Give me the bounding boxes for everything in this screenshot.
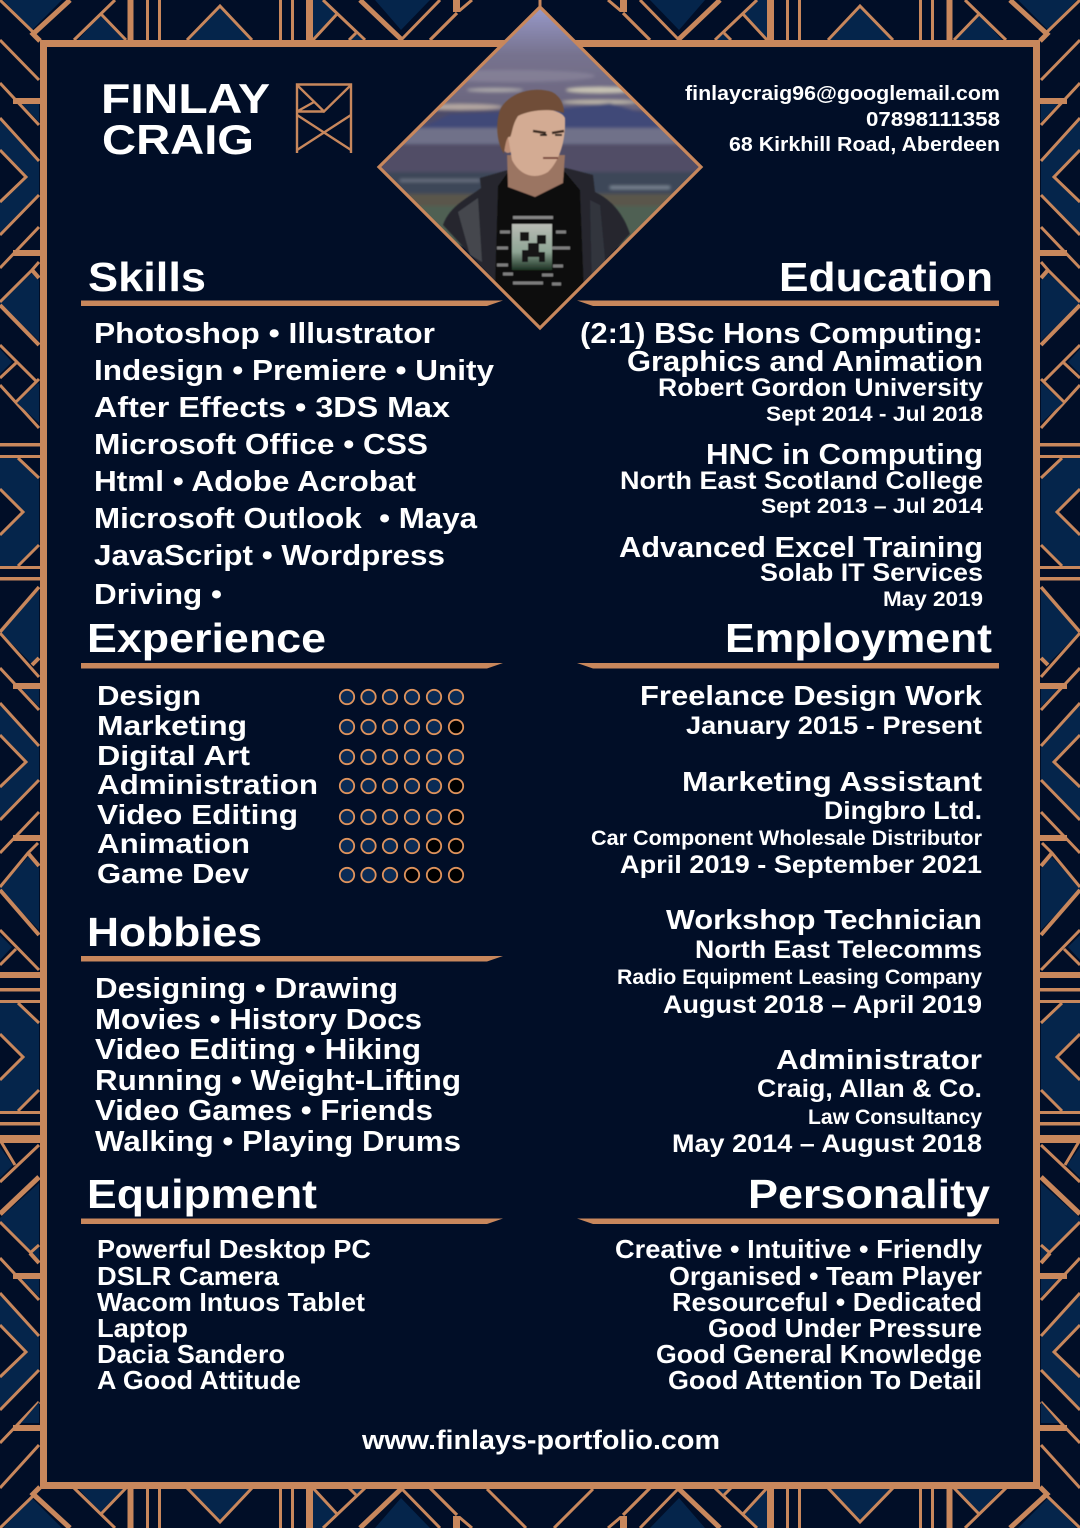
chart: experience rating dots — [340, 690, 463, 882]
divider: experience — [81, 663, 503, 668]
list: experience labels: Video Editing — [97, 799, 298, 830]
list: experience labels: Marketing — [97, 710, 247, 741]
list: education entries: HNC in Computing — [706, 439, 983, 471]
list: equipment: DSLR Camera — [97, 1261, 280, 1291]
panel: hobbies — [81, 909, 503, 1158]
list: employment entries: Workshop Technician — [666, 904, 982, 935]
list: experience labels: Digital Art — [97, 740, 250, 771]
panel: employment — [577, 615, 999, 1158]
list: skills: After Effects • 3DS Max — [94, 392, 450, 424]
list: employment entries: April 2019 - September 2021 — [620, 851, 982, 879]
list: skills — [94, 318, 494, 611]
list: equipment: Wacom Intuos Tablet — [97, 1287, 365, 1317]
divider: personality — [577, 1218, 999, 1224]
list: personality: Organised • Team Player — [669, 1261, 982, 1291]
divider: hobbies — [81, 956, 503, 962]
list: equipment: A Good Attitude — [97, 1365, 301, 1395]
panel: skills — [81, 254, 503, 611]
list: education entries: Solab IT Services — [760, 559, 983, 587]
list: education entries: Advanced Excel Training — [619, 532, 983, 564]
list: personality: Good General Knowledge — [656, 1339, 982, 1369]
list: employment entries: Law Consultancy — [808, 1106, 982, 1129]
list: hobbies: Designing • Drawing — [95, 973, 398, 1005]
list: personality: Good Under Pressure — [708, 1313, 982, 1343]
list: equipment: Powerful Desktop PC — [97, 1234, 371, 1264]
list: hobbies: Video Games • Friends — [95, 1095, 433, 1127]
list: hobbies: Movies • History Docs — [95, 1004, 422, 1036]
list: personality: Resourceful • Dedicated — [672, 1287, 982, 1317]
list: skills: Microsoft Office • CSS — [94, 429, 428, 461]
divider: equipment — [81, 1218, 503, 1224]
list: skills: Indesign • Premiere • Unity — [94, 355, 494, 387]
list: experience labels: Administration — [97, 769, 318, 800]
heading: experience: Experience — [87, 615, 326, 661]
list: employment entries: North East Telecomms — [695, 936, 982, 964]
list: employment entries: Dingbro Ltd. — [824, 797, 982, 825]
divider: education — [577, 300, 999, 306]
list: education entries: Graphics and Animation — [627, 346, 983, 378]
list: education entries: Robert Gordon University — [658, 374, 983, 402]
divider: skills — [81, 300, 503, 306]
list: education entries: May 2019 — [883, 588, 983, 611]
footer website: www.finlays-portfolio.com — [361, 1425, 720, 1455]
panel: experience — [81, 615, 503, 889]
list: experience labels: Design — [97, 680, 201, 711]
panel: education — [577, 254, 999, 611]
heading: hobbies: Hobbies — [87, 909, 262, 955]
list: skills: Microsoft Outlook • Maya — [94, 503, 478, 535]
list: education entries — [580, 318, 983, 611]
list: skills: Html • Adobe Acrobat — [94, 466, 416, 498]
list: employment entries: Freelance Design Work — [640, 680, 982, 711]
name title — [101, 75, 270, 163]
heading: personality: Personality — [748, 1171, 990, 1217]
heading: employment: Employment — [725, 615, 992, 661]
divider: employment — [577, 663, 999, 668]
list: experience labels — [97, 680, 318, 889]
list: personality: Creative • Intuitive • Friendly — [615, 1234, 983, 1264]
portrait photo in diamond — [370, 0, 710, 330]
list: equipment: Dacia Sandero — [97, 1339, 285, 1369]
icon: envelope logo — [297, 84, 351, 153]
contact details: 07898111358 — [866, 109, 1000, 131]
list: experience labels: Game Dev — [97, 858, 249, 889]
list: employment entries — [591, 680, 983, 1158]
list: employment entries: Craig, Allan & Co. — [757, 1075, 982, 1103]
list: education entries: (2:1) BSc Hons Computing: — [580, 318, 983, 350]
list: personality — [615, 1234, 983, 1395]
list: equipment — [97, 1234, 371, 1395]
list: employment entries: Marketing Assistant — [682, 766, 982, 797]
list: hobbies: Running • Weight-Lifting — [95, 1065, 461, 1097]
contact details: 68 Kirkhill Road, Aberdeen — [729, 134, 1000, 156]
list: employment entries: January 2015 - Present — [686, 712, 983, 740]
list: skills: JavaScript • Wordpress — [94, 540, 445, 572]
list: employment entries: Car Component Wholesale Distributor — [591, 827, 982, 850]
list: employment entries: Administrator — [776, 1044, 982, 1075]
heading: equipment: Equipment — [87, 1171, 317, 1217]
heading: skills: Skills — [88, 254, 206, 300]
panel: personality — [577, 1171, 999, 1395]
contact details — [685, 83, 1000, 156]
list: employment entries: August 2018 – April 2019 — [663, 991, 982, 1019]
heading: education: Education — [779, 254, 993, 300]
list: skills: Driving • — [94, 579, 222, 611]
list: education entries: North East Scotland College — [620, 467, 983, 495]
list: employment entries: Radio Equipment Leasing Company — [617, 966, 982, 989]
contact details: finlaycraig96@googlemail.com — [685, 83, 1000, 105]
list: hobbies: Walking • Playing Drums — [95, 1126, 461, 1158]
list: skills: Photoshop • Illustrator — [94, 318, 435, 350]
name title: CRAIG — [102, 116, 254, 163]
list: hobbies: Video Editing • Hiking — [95, 1034, 421, 1066]
list: hobbies — [95, 973, 461, 1158]
list: experience labels: Animation — [97, 828, 250, 859]
list: education entries: Sept 2013 – Jul 2014 — [761, 495, 983, 518]
list: personality: Good Attention To Detail — [668, 1365, 982, 1395]
list: equipment: Laptop — [97, 1313, 188, 1343]
list: employment entries: May 2014 – August 2018 — [672, 1130, 982, 1158]
list: education entries: Sept 2014 - Jul 2018 — [766, 403, 983, 426]
name title: FINLAY — [101, 75, 270, 122]
panel: equipment — [81, 1171, 503, 1395]
